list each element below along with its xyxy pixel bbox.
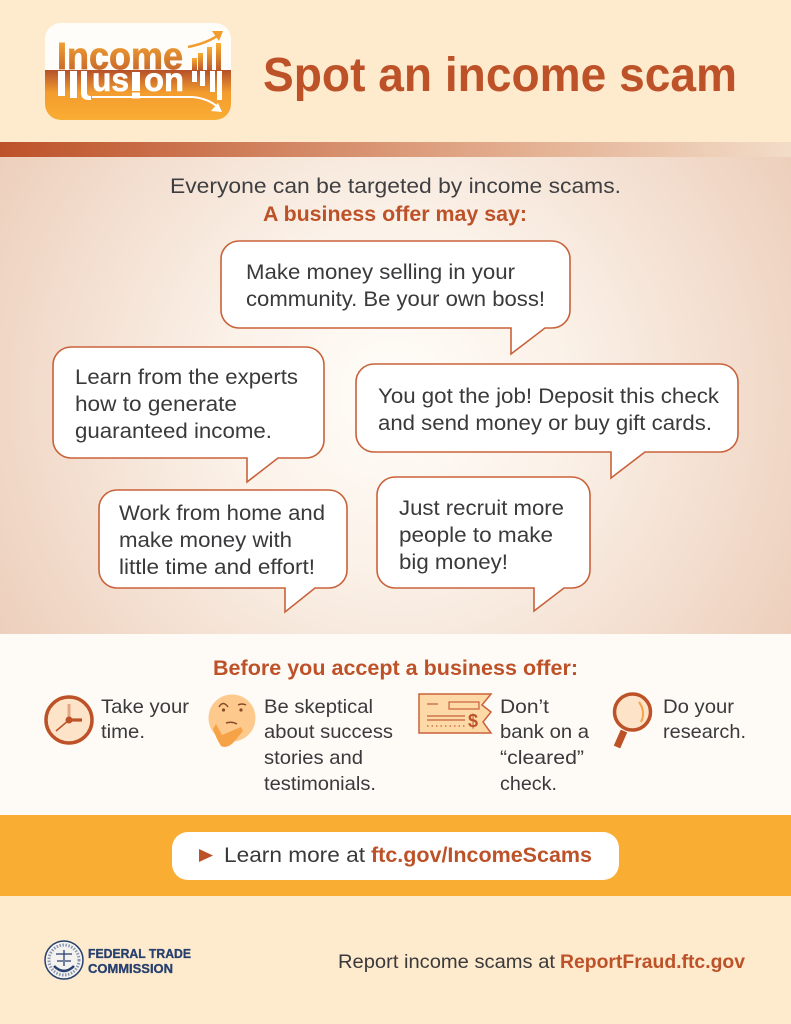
speech bubble: selling: community. Be your own boss!: [246, 287, 545, 311]
header logo: Income: [57, 36, 183, 78]
speech bubble: experts: guaranteed income.: [75, 419, 272, 443]
speech bubble: recruit: [377, 477, 590, 611]
tip: do your research: [663, 696, 746, 743]
tip: take your time: time.: [101, 721, 145, 743]
speech bubble: recruit: big money!: [399, 550, 508, 574]
FTC wordmark: [88, 946, 191, 976]
icon: check: [419, 694, 491, 733]
speech bubble: selling: Make money selling in your: [246, 260, 515, 284]
tip: take your time: Take your: [101, 696, 190, 718]
speech bubble: experts: how to generate: [75, 392, 237, 416]
header logo: on: [144, 61, 184, 98]
panel: business offers: [0, 157, 791, 634]
tip: cleared check: “cleared”: [500, 747, 584, 769]
report line: ReportFraud.ftc.gov: [560, 951, 745, 973]
learn more button: ftc.gov/IncomeScams: [371, 843, 592, 867]
icon: check: $: [468, 711, 478, 731]
call to action band: [0, 815, 791, 896]
speech bubble: job check: and send money or buy gift cards.: [378, 411, 712, 435]
header logo: us: [92, 61, 129, 98]
tip: cleared check: [500, 696, 589, 795]
learn more button: [172, 832, 619, 880]
speech bubble: work from home: Work from home and: [119, 501, 325, 525]
report line: Report income scams at: [338, 951, 556, 973]
FTC wordmark: COMMISSION: [88, 961, 173, 976]
tip: be skeptical: about success: [264, 721, 393, 743]
learn more button: Learn more at: [224, 843, 365, 867]
speech bubble: work from home: little time and effort!: [119, 555, 315, 579]
icon: clock: [46, 697, 92, 743]
panel: before you accept: [0, 634, 791, 815]
speech bubble: job check: You got the job! Deposit this check: [378, 384, 719, 408]
header logo: [45, 23, 231, 120]
tip: be skeptical: Be skeptical: [264, 696, 373, 718]
tip: cleared check: bank on a: [500, 721, 589, 743]
speech bubble: work from home: [99, 490, 347, 612]
tip: be skeptical: testimonials.: [264, 773, 376, 795]
icon: magnifying glass: [614, 694, 650, 747]
section heading: Before you accept a business offer:: [213, 657, 578, 680]
tip: take your time: [101, 696, 190, 743]
tip: cleared check: Don’t: [500, 696, 550, 718]
subheading: A business offer may say:: [263, 202, 527, 226]
tip: cleared check: check.: [500, 773, 557, 795]
speech bubble: job check: [356, 364, 738, 478]
icon: thinking face: [208, 694, 256, 747]
speech bubble: experts: [53, 347, 324, 482]
speech bubble: experts: Learn from the experts: [75, 365, 298, 389]
tip: be skeptical: stories and: [264, 747, 363, 769]
speech bubble: recruit: people to make: [399, 523, 553, 547]
FTC seal: [45, 941, 83, 979]
tip: do your research: research.: [663, 721, 746, 743]
gradient divider bar: [0, 142, 791, 157]
report line: [338, 951, 745, 973]
speech bubble: work from home: make money with: [119, 528, 292, 552]
title: Spot an income scam: [263, 49, 737, 102]
tip: be skeptical: [264, 696, 393, 795]
intro text: Everyone can be targeted by income scams.: [170, 174, 621, 198]
speech bubble: recruit: Just recruit more: [399, 496, 564, 520]
tip: do your research: Do your: [663, 696, 735, 718]
FTC wordmark: FEDERAL TRADE: [88, 946, 191, 961]
speech bubble: selling: [221, 241, 570, 354]
